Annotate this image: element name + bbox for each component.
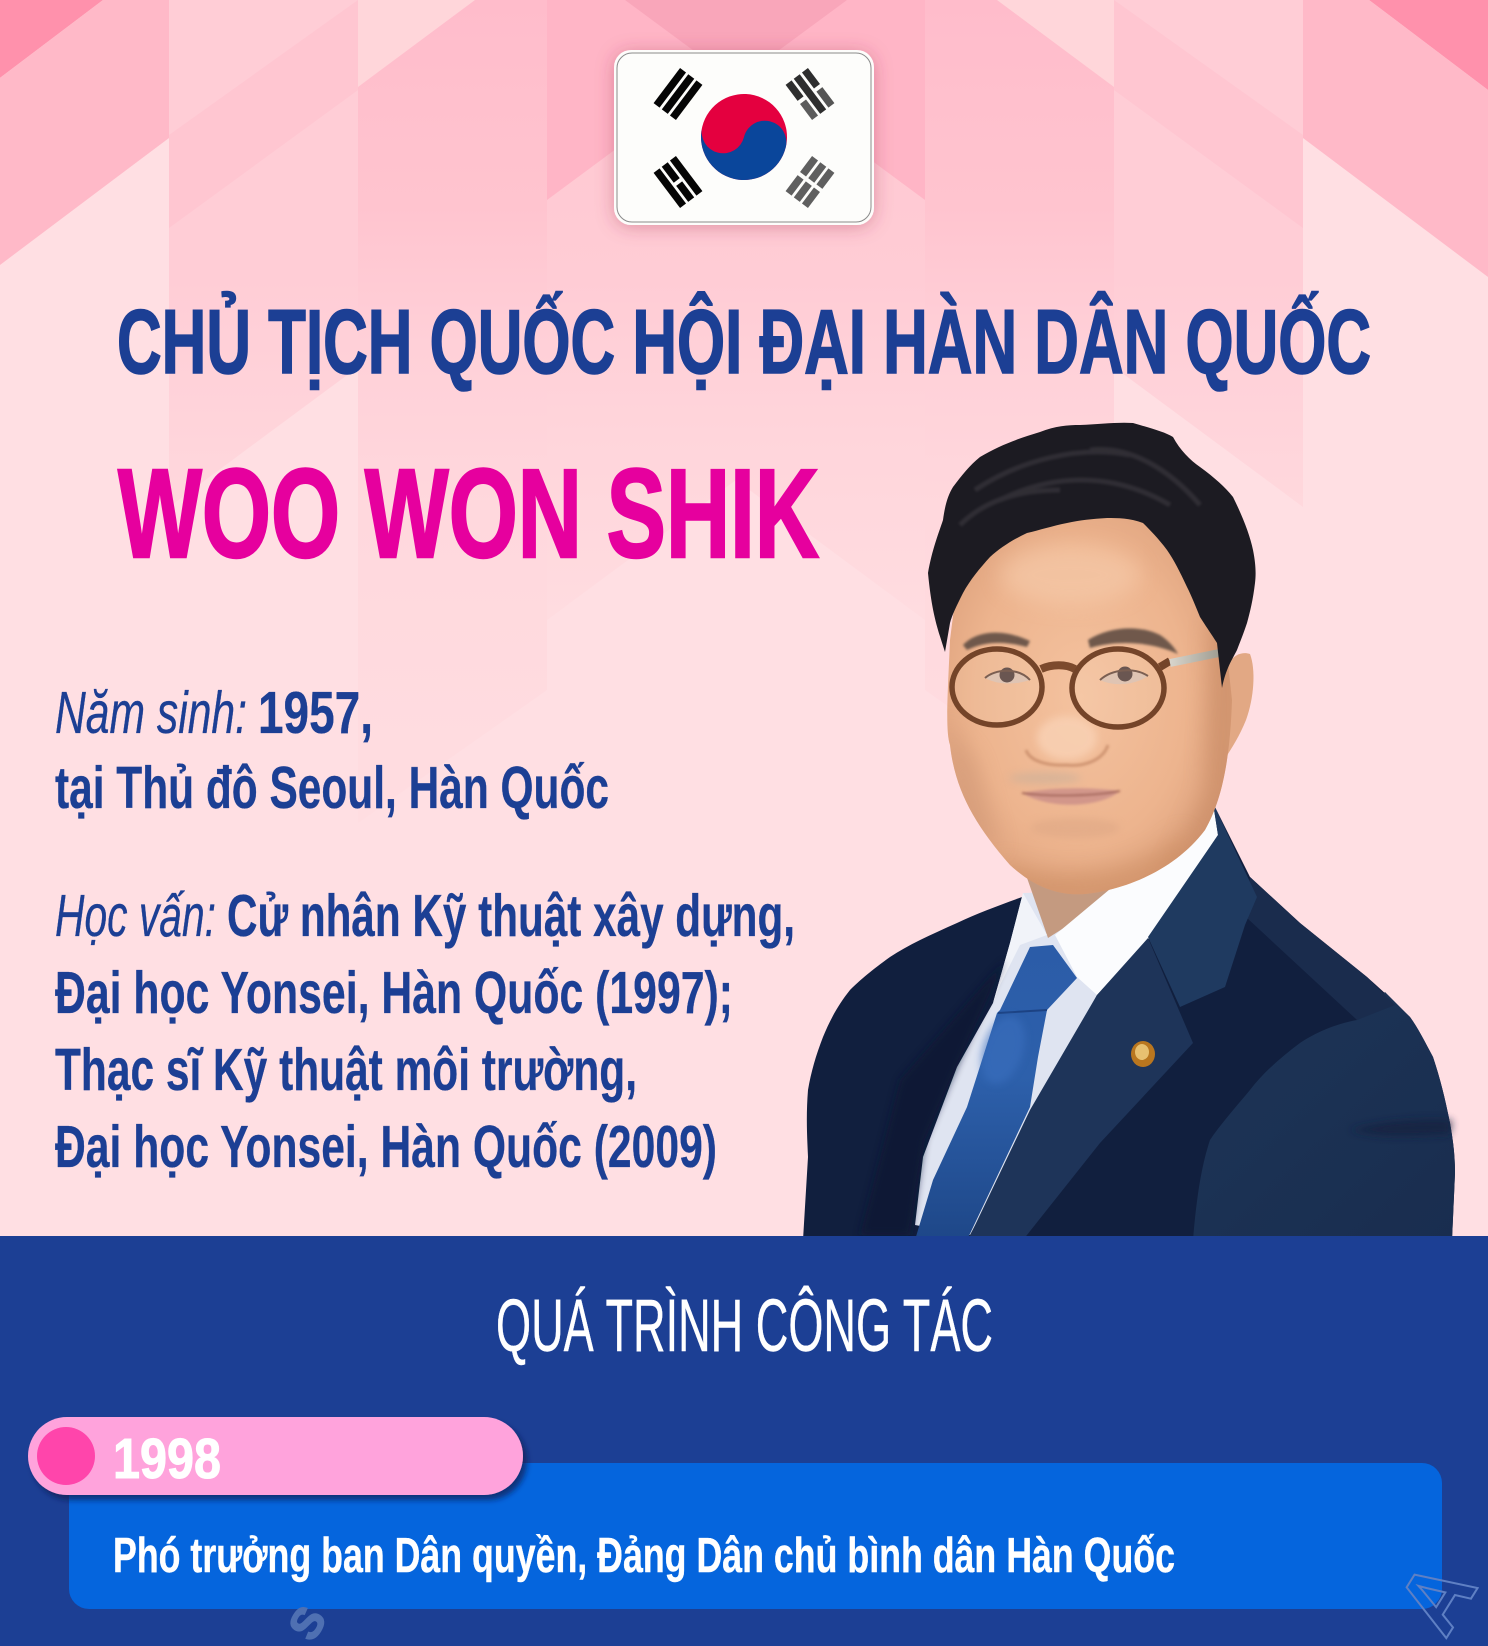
text block: education: Đại học Yonsei, Hàn Quốc (2009) <box>55 1114 717 1180</box>
text block: education: Đại học Yonsei, Hàn Quốc (1997); <box>55 960 733 1026</box>
icon: trigram top left <box>654 68 702 120</box>
portrait illustration <box>803 423 1455 1240</box>
text block: education: Học vấn: <box>55 883 216 949</box>
left inner shadow <box>860 960 1005 1235</box>
upper lapel <box>1148 803 1257 1007</box>
lower lapel <box>968 938 1193 1240</box>
text block: birth: Năm sinh: <box>55 680 247 746</box>
tie knot crease <box>998 1010 1047 1013</box>
text block: birth: tại Thủ đô Seoul, Hàn Quốc <box>55 755 609 821</box>
face <box>947 500 1232 894</box>
panel: career section <box>0 1236 1488 1646</box>
shirt collar <box>1055 803 1218 995</box>
shirt <box>915 892 1148 1235</box>
text block: birth <box>55 680 609 821</box>
sleeve fold <box>1350 1120 1452 1136</box>
nose <box>1026 716 1108 765</box>
year dot <box>37 1427 95 1485</box>
hair highlights <box>960 449 1200 525</box>
tie <box>915 945 1077 1240</box>
text block: birth: 1957, <box>258 680 373 746</box>
eyebrows <box>963 628 1178 654</box>
tie highlight <box>976 1017 1023 1082</box>
suit jacket <box>803 803 1455 1240</box>
icon: trigram bottom right <box>786 156 834 208</box>
neck <box>1027 878 1110 938</box>
timeline card <box>69 1463 1442 1609</box>
icon: trigram bottom left <box>654 156 702 208</box>
ear <box>1228 653 1254 754</box>
text block: education: Cử nhân Kỹ thuật xây dựng, <box>227 883 795 949</box>
lapel pin <box>1131 1041 1155 1067</box>
face shading <box>945 545 1240 910</box>
glasses <box>952 649 1234 727</box>
mouth <box>1022 788 1120 805</box>
icon: trigram top right <box>786 68 834 120</box>
year label: 1998 <box>113 1427 221 1491</box>
name heading: WOO WON SHIK <box>118 443 819 584</box>
right sleeve <box>1193 992 1455 1240</box>
section heading: QUÁ TRÌNH CÔNG TÁC <box>496 1284 993 1367</box>
text block: education: Thạc sĩ Kỹ thuật môi trường, <box>55 1037 637 1103</box>
eyes <box>985 666 1148 684</box>
icon: taegeuk circle <box>692 85 796 189</box>
left collar <box>993 893 1047 1003</box>
shoulder seam <box>1247 877 1395 1020</box>
hair <box>928 423 1256 688</box>
icon: South Korea flag <box>614 50 874 225</box>
text block: education <box>55 883 795 1180</box>
year pill <box>28 1417 523 1495</box>
